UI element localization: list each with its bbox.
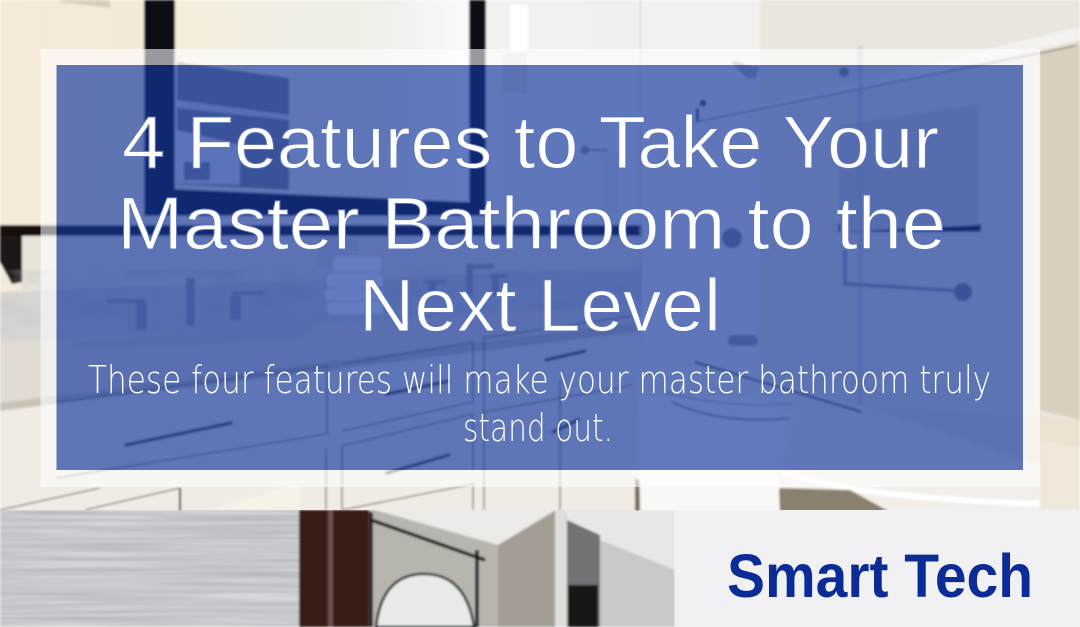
white translucent frame	[40, 49, 1040, 487]
picture corner	[60, 0, 110, 8]
wood door frame	[299, 510, 369, 627]
tub	[635, 362, 1080, 512]
title: Master Bathroom to the	[117, 182, 946, 265]
subtitle: stand out.	[463, 406, 613, 450]
title: Next Level	[359, 264, 721, 347]
counter	[0, 305, 640, 405]
tub spout	[728, 335, 758, 346]
handles	[126, 351, 585, 473]
title	[117, 101, 946, 347]
subtitle	[88, 358, 991, 450]
shower	[642, 0, 760, 400]
grab bar	[845, 250, 965, 291]
shower wall tiles	[760, 0, 1080, 470]
textured wallpaper	[0, 510, 299, 627]
wall sconce	[510, 5, 528, 65]
back room	[369, 510, 675, 627]
toilet	[638, 395, 793, 512]
valve	[722, 228, 742, 248]
black shower frame	[371, 512, 485, 627]
backsplash band	[0, 225, 698, 236]
mirror	[144, 0, 486, 216]
photo: second bathroom strip	[0, 510, 675, 627]
floor	[635, 478, 700, 512]
vanity cabinet	[0, 332, 636, 512]
heading: smart tech: Smart Tech	[727, 542, 1033, 610]
title: 4 Features to Take Your	[122, 101, 939, 184]
faucets	[107, 264, 508, 330]
towels	[318, 238, 358, 268]
blue translucent panel	[56, 65, 1023, 470]
arched mirror	[376, 574, 474, 627]
shower head	[731, 61, 760, 79]
panel: smart tech	[675, 510, 1080, 627]
towel hook	[584, 149, 608, 151]
